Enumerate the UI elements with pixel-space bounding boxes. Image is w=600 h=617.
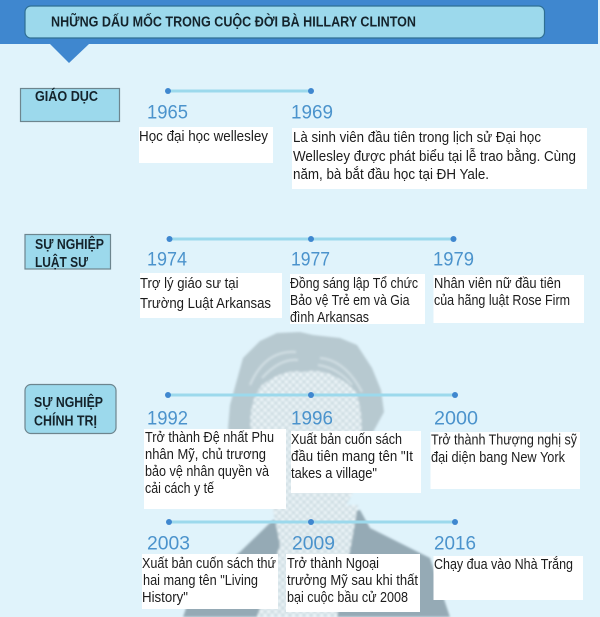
timeline: political career row 2 [166, 519, 458, 525]
text block 1969 [292, 128, 587, 189]
panel: political career [25, 384, 583, 612]
text block 2003: hai mang tên "Living [143, 573, 258, 589]
text block 2003 [142, 554, 278, 609]
year 2000: 2000 [434, 408, 478, 430]
text block 1969: Là sinh viên đầu tiên trong lịch sử Đại học [293, 130, 541, 146]
text block 1977: Bảo vệ Trẻ em và Gia [290, 293, 410, 309]
text block 2016 [434, 556, 583, 600]
text block 1974: Trường Luật Arkansas [140, 296, 271, 312]
header band [0, 0, 598, 44]
text block 2009: bại cuộc bầu cử 2008 [287, 590, 408, 606]
year 1969: 1969 [291, 102, 333, 124]
year 2003: 2003 [147, 532, 190, 554]
header pointer arrow [50, 44, 89, 63]
panel: education [20, 88, 587, 189]
text block 2003: Xuất bản cuốn sách thứ [142, 556, 276, 572]
text block 2000: Trở thành Thượng nghị sỹ [431, 432, 578, 448]
label: political career: SỰ NGHIỆP [34, 393, 103, 411]
panel: legal career [25, 234, 584, 326]
text block 1992: Trở thành Đệ nhất Phu [145, 430, 274, 446]
text block 1977: đình Arkansas [290, 310, 369, 326]
text block 1965 [139, 127, 273, 163]
portrait: hair [228, 332, 384, 470]
timeline: political career row 1 [165, 392, 458, 398]
text block 1969: năm, bà bắt đầu học tại ĐH Yale. [293, 166, 489, 183]
text block 2009: trưởng Mỹ sau khi thất [287, 573, 418, 589]
label: education: GIÁO DỤC [35, 88, 98, 105]
year 1992: 1992 [147, 408, 188, 430]
text block 1992: cải cách y tế [145, 481, 214, 497]
timeline: legal career [166, 236, 456, 242]
year 2009: 2009 [292, 532, 335, 554]
portrait: suit [183, 510, 450, 617]
text block 1969: Wellesley được phát biểu tại lễ trao bằng. Cùng [293, 148, 576, 165]
text block 1974: Trợ lý giáo sư tại [140, 276, 238, 292]
year 1996: 1996 [291, 408, 333, 430]
text block 1992: bảo vệ nhân quyền và [145, 464, 270, 480]
text block 2009: Trở thành Ngoại [287, 556, 379, 572]
text block 1965: Học đại học wellesley [139, 129, 269, 145]
year 1977: 1977 [291, 248, 330, 270]
year 1979: 1979 [433, 248, 474, 270]
label: legal career: SỰ NGHIỆP [35, 235, 104, 253]
text block 1996 [291, 431, 421, 493]
portrait of Hillary Clinton [183, 332, 450, 617]
text block 2000 [430, 432, 580, 489]
portrait: face [250, 371, 362, 532]
text block 1996: Xuất bản cuốn sách [291, 432, 402, 448]
label: legal career: LUẬT SƯ [35, 253, 89, 271]
year 2016: 2016 [434, 532, 476, 554]
label: political career: CHÍNH TRỊ [34, 412, 97, 430]
portrait: neck and collar [257, 505, 358, 617]
label: legal career [25, 234, 110, 271]
text block 2000: đại diện bang New York [431, 450, 566, 466]
title: NHỮNG DẤU MỐC TRONG CUỘC ĐỜI BÀ HILLARY CLINTON [51, 12, 416, 30]
label: political career [25, 384, 116, 434]
text block 1992: nhân Mỹ, chủ trương [145, 447, 266, 463]
text block 2016: Chạy đua vào Nhà Trắng [434, 556, 573, 573]
text block 1996: takes a village" [291, 466, 377, 482]
text block 1979: Nhân viên nữ đầu tiên [434, 276, 561, 292]
text block 1979 [434, 275, 584, 323]
title box [25, 6, 544, 38]
text block 1996: đầu tiên mang tên "It [291, 449, 413, 465]
text block 1977: Đồng sáng lập Tổ chức [290, 276, 418, 292]
text block 2009 [286, 554, 420, 612]
label: education [20, 88, 120, 122]
text block 1979: của hãng luật Rose Firm [434, 293, 570, 309]
text block 1977 [290, 274, 425, 326]
text block 1992 [144, 429, 286, 509]
text block 1974 [140, 273, 282, 318]
text block 2003: History" [142, 590, 188, 606]
year 1965: 1965 [147, 102, 188, 124]
portrait: hair strands [250, 352, 362, 392]
timeline: education [165, 88, 314, 94]
year 1974: 1974 [147, 248, 187, 270]
